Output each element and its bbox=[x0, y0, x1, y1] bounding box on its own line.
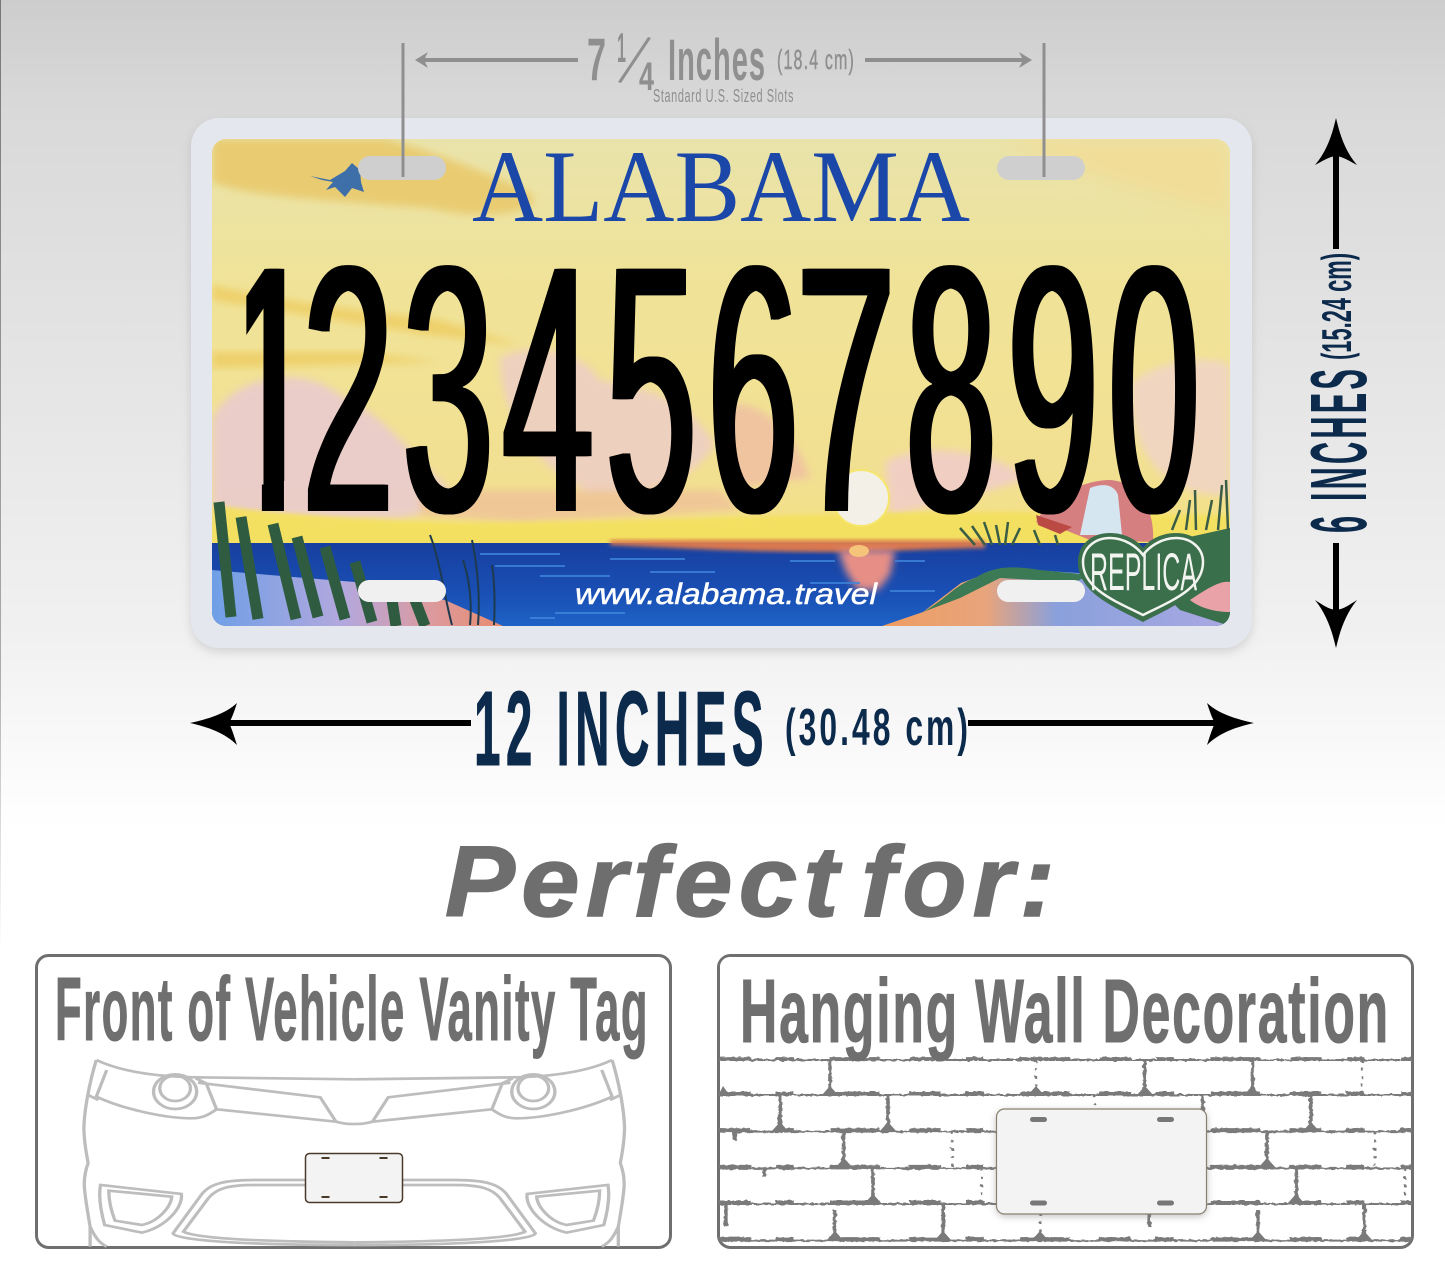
slot spacing dimension: Inches bbox=[668, 28, 766, 93]
plate number: 3 bbox=[403, 192, 493, 586]
beach grass bbox=[960, 480, 1228, 545]
plate number bbox=[246, 192, 1199, 586]
slot: bottom right bbox=[997, 580, 1085, 602]
panel: front of vehicle: Front of Vehicle Vanity Tag bbox=[55, 960, 649, 1060]
slot spacing dimension bbox=[402, 24, 1046, 177]
website: www.alabama.travel bbox=[575, 578, 878, 611]
blank plate on wall bbox=[996, 1109, 1206, 1216]
replica heart badge: REPLICA bbox=[1090, 543, 1197, 602]
slot spacing dimension: Standard U.S. Sized Slots bbox=[653, 86, 794, 106]
reeds bbox=[430, 535, 495, 625]
slot: top right bbox=[997, 156, 1085, 180]
plate number: 9 bbox=[1008, 192, 1098, 586]
plate number: 6 bbox=[708, 192, 798, 586]
car front line drawing bbox=[84, 1060, 625, 1247]
mortar joints bbox=[718, 1086, 1373, 1241]
slot: bottom left bbox=[358, 580, 446, 602]
height dimension: 6 inches: 6 INCHES bbox=[1294, 366, 1383, 533]
panel: wall decoration bbox=[718, 956, 1412, 1248]
umbrella bbox=[1036, 480, 1153, 542]
width dimension: 12 inches: 12 INCHES bbox=[474, 670, 769, 788]
width dimension: 12 inches bbox=[190, 670, 1254, 788]
brick wall bbox=[719, 1059, 1412, 1241]
plate number: 8 bbox=[906, 192, 996, 586]
right dune and sand bbox=[882, 568, 1230, 626]
width dimension: 12 inches: (30.48 cm) bbox=[785, 699, 971, 757]
plate body bbox=[191, 118, 1252, 648]
state name: ALABAMA bbox=[472, 130, 970, 244]
plate number: 4 bbox=[503, 192, 593, 586]
water bbox=[212, 543, 1230, 626]
license plate bbox=[188, 118, 1255, 655]
replica heart badge bbox=[1078, 533, 1208, 622]
plate number: 2 bbox=[303, 192, 393, 586]
plate number: 1 bbox=[226, 192, 316, 586]
plate number: 5 bbox=[606, 192, 696, 586]
sun bbox=[833, 470, 889, 526]
white area behind title bbox=[720, 957, 1411, 1055]
left sand bbox=[212, 570, 503, 626]
panel: front of vehicle bbox=[36, 956, 670, 1248]
plate artwork: sunset beach scene bbox=[212, 139, 1230, 626]
plate shadow bbox=[191, 122, 1252, 652]
slot spacing dimension: 4 bbox=[639, 55, 655, 99]
slot spacing dimension: (18.4 cm) bbox=[777, 44, 855, 75]
slot: top left bbox=[358, 156, 446, 180]
slot spacing dimension: 1 bbox=[617, 24, 626, 71]
slot spacing dimension: 7 bbox=[587, 26, 606, 93]
bird bbox=[310, 163, 364, 197]
plate number: 7 bbox=[797, 192, 895, 586]
height dimension: 6 inches: (15.24 cm) bbox=[1313, 253, 1360, 360]
heading: perfect for: Perfect for: bbox=[445, 826, 1061, 938]
plate number: 0 bbox=[1109, 192, 1199, 586]
fence bbox=[219, 502, 425, 626]
small plate on car bbox=[306, 1154, 402, 1202]
